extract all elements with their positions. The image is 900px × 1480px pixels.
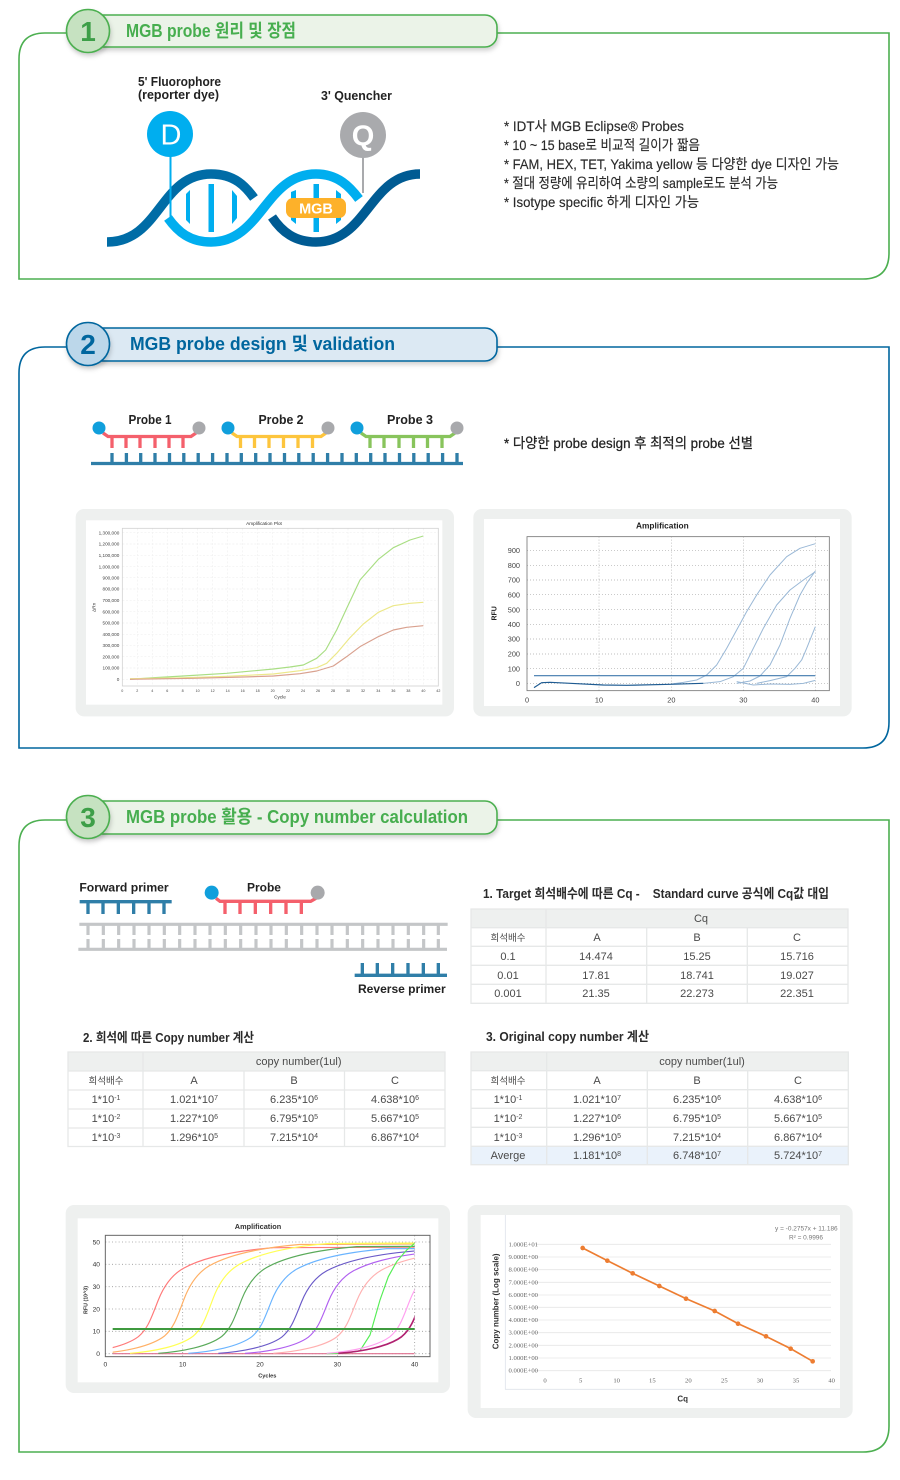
table 3: original copy number: 7 bbox=[717, 1151, 721, 1158]
table 2: copy number by dilution bbox=[68, 1052, 445, 1146]
chart: multi-dilution amplification: 20 bbox=[93, 1306, 100, 1313]
chart: standard curve bbox=[468, 1205, 853, 1418]
table 3: original copy number: 1*10 bbox=[494, 1113, 516, 1125]
table 3: original copy number: A bbox=[593, 1075, 601, 1087]
table 3: original copy number: -2 bbox=[516, 1114, 523, 1121]
chart: standard curve: 10 bbox=[613, 1377, 621, 1384]
heading bar 3: 3 bbox=[80, 802, 96, 833]
table 3: original copy number: 6.748*10 bbox=[673, 1150, 717, 1162]
chart: amplification RFU: 40 bbox=[811, 696, 819, 705]
table 2: copy number by dilution: copy number(1ul) bbox=[256, 1056, 341, 1068]
chart: multi-dilution amplification: Amplification bbox=[235, 1222, 282, 1231]
table 1: Cq values: A bbox=[593, 932, 601, 944]
table 3: original copy number: 1.296*10 bbox=[573, 1132, 617, 1144]
heading: table 2: 2. 희석에 따른 Copy number 계산 bbox=[83, 1030, 254, 1045]
table 3: original copy number: 1.227*10 bbox=[573, 1113, 617, 1125]
table 1: Cq values: Cq bbox=[694, 913, 708, 925]
chart: amplification RFU: 20 bbox=[667, 696, 675, 705]
chart: amplification RFU: 700 bbox=[508, 576, 520, 585]
diagram: probes 1-3 on template: Probe 2 bbox=[258, 412, 304, 427]
diagram: primers and probe on DNA: Probe bbox=[247, 880, 281, 894]
chart: amplification plot: 10 bbox=[196, 689, 200, 693]
table 1: Cq values: B bbox=[693, 932, 701, 944]
chart: amplification RFU: 600 bbox=[508, 590, 520, 599]
chart: amplification plot: 34 bbox=[376, 689, 380, 693]
table 3: original copy number: B bbox=[693, 1075, 701, 1087]
chart: amplification RFU: RFU bbox=[491, 606, 498, 621]
heading: table 1: 1. Target 희석배수에 따른 Cq - Standard curve 공식에 Cq값 대입 bbox=[483, 886, 829, 901]
chart: standard curve: 0 bbox=[543, 1377, 547, 1384]
chart: standard curve: 20 bbox=[685, 1377, 692, 1384]
table 3: original copy number: -1 bbox=[516, 1095, 523, 1102]
label: 3' quencher: 3' Quencher bbox=[321, 88, 392, 103]
bullet list: probe advantages bbox=[504, 118, 839, 210]
chart: amplification plot: 2 bbox=[136, 689, 138, 693]
label: 5' fluorophore: (reporter dye) bbox=[138, 87, 219, 102]
table 2: copy number by dilution: 1.227*10 bbox=[170, 1113, 214, 1125]
table 1: Cq values: 18.741 bbox=[680, 970, 714, 982]
chart: amplification plot: 28 bbox=[331, 689, 335, 693]
bullet list: probe advantages: * 10 ~ 15 base로 비교적 길이가 짧음 bbox=[504, 137, 700, 153]
table 1: Cq values: 희석배수 bbox=[491, 933, 526, 944]
table 2: copy number by dilution: 6.235*10 bbox=[270, 1094, 314, 1106]
chart: amplification RFU: 800 bbox=[508, 561, 520, 570]
diagram: primers and probe on DNA bbox=[78, 880, 448, 996]
table 2: copy number by dilution: 4.638*10 bbox=[371, 1094, 415, 1106]
chart: multi-dilution amplification: 10 bbox=[179, 1361, 187, 1368]
chart: amplification RFU: 300 bbox=[508, 635, 520, 644]
panel: section 1 principle bbox=[19, 10, 889, 279]
heading bar 2 bbox=[66, 322, 497, 366]
chart: amplification RFU: 30 bbox=[739, 696, 747, 705]
chart: standard curve: 5 bbox=[579, 1377, 583, 1384]
table 2: copy number by dilution: -2 bbox=[114, 1114, 121, 1121]
chart: amplification plot: 36 bbox=[391, 689, 395, 693]
table 2: copy number by dilution: 4 bbox=[314, 1133, 318, 1140]
table 3: original copy number: 1.021*10 bbox=[573, 1094, 617, 1106]
chart: amplification plot: 200,000 bbox=[102, 654, 120, 659]
bullet list: probe advantages: * IDT사 MGB Eclipse® Probes bbox=[504, 118, 684, 134]
chart: standard curve: 40 bbox=[828, 1377, 836, 1384]
chart: standard curve: 9.000E+00 bbox=[509, 1254, 539, 1261]
table 2: copy number by dilution: 희석배수 bbox=[89, 1076, 124, 1087]
panel border 3 bbox=[19, 820, 889, 1452]
label: 5' fluorophore bbox=[138, 74, 221, 102]
chart: amplification RFU: 0 bbox=[516, 679, 520, 688]
chart: amplification plot: 40 bbox=[421, 689, 425, 693]
bullet list: probe advantages: * FAM, HEX, TET, Yakima yellow 등 다양한 dye 디자인 가능 bbox=[504, 156, 839, 172]
table 2: copy number by dilution: 1*10 bbox=[92, 1132, 114, 1144]
table 3: original copy number: 8 bbox=[617, 1151, 621, 1158]
table 3: original copy number: 7.215*10 bbox=[673, 1132, 717, 1144]
icon: DNA helix with dye, quencher and MGB: D bbox=[161, 120, 181, 152]
chart: standard curve: Cq bbox=[677, 1395, 688, 1404]
chart: amplification plot: 600,000 bbox=[102, 609, 120, 614]
chart: amplification RFU: Amplification bbox=[636, 520, 689, 530]
heading bar 2: 2 bbox=[80, 329, 96, 360]
chart: amplification RFU: 0 bbox=[525, 696, 529, 705]
heading bar 2: MGB probe design 및 validation bbox=[130, 334, 395, 354]
table 1: Cq values: 15.716 bbox=[780, 951, 814, 963]
bullet list: probe advantages: * Isotype specific 하게 디자인 가능 bbox=[504, 194, 699, 210]
chart: amplification plot: 38 bbox=[406, 689, 410, 693]
chart: amplification plot: ΔRn bbox=[91, 602, 96, 612]
table 2: copy number by dilution: 7.215*10 bbox=[270, 1132, 314, 1144]
table 3: original copy number: 6.235*10 bbox=[673, 1094, 717, 1106]
table 1: Cq values: 0.001 bbox=[494, 988, 522, 1000]
table 3: original copy number: 1*10 bbox=[494, 1132, 516, 1144]
diagram: primers and probe on DNA: Forward primer bbox=[79, 880, 169, 894]
chart: amplification plot: 400,000 bbox=[102, 632, 120, 637]
chart: amplification plot bbox=[76, 509, 454, 716]
diagram: probes 1-3 on template bbox=[91, 412, 464, 464]
heading: table 3: 3. Original copy number 계산 bbox=[486, 1029, 649, 1044]
chart: multi-dilution amplification: RFU (10^3) bbox=[83, 1286, 89, 1314]
chart: standard curve: Copy number (Log scale) bbox=[491, 1253, 500, 1349]
chart: multi-dilution amplification bbox=[66, 1205, 450, 1393]
chart: multi-dilution amplification: 0 bbox=[103, 1361, 107, 1368]
heading bar 1 bbox=[66, 10, 497, 52]
table 1: Cq values: 15.25 bbox=[683, 951, 711, 963]
table 1: Cq values bbox=[471, 909, 848, 1003]
chart: amplification plot: 8 bbox=[182, 689, 184, 693]
table 3: original copy number: 5 bbox=[818, 1114, 822, 1121]
chart: amplification plot: Cycle bbox=[274, 695, 286, 700]
table 3: original copy number: 6 bbox=[818, 1095, 822, 1102]
chart: amplification plot: 22 bbox=[286, 689, 290, 693]
chart: amplification plot: 700,000 bbox=[102, 598, 120, 603]
table 1: Cq values: C bbox=[793, 932, 801, 944]
chart: multi-dilution amplification: 0 bbox=[96, 1351, 100, 1358]
panel border 1 bbox=[19, 33, 889, 279]
chart: standard curve: 15 bbox=[649, 1377, 656, 1384]
chart: amplification plot: 12 bbox=[211, 689, 215, 693]
chart: amplification plot: 24 bbox=[301, 689, 305, 693]
table 2: copy number by dilution: 5 bbox=[214, 1133, 218, 1140]
panel border 2 bbox=[19, 347, 889, 748]
diagram: primers and probe on DNA: Reverse primer bbox=[358, 982, 446, 996]
chart: standard curve: R² = 0.9996 bbox=[789, 1234, 823, 1241]
chart: multi-dilution amplification: 30 bbox=[334, 1361, 341, 1368]
chart: amplification plot: 42 bbox=[436, 689, 440, 693]
table 3: original copy number: 5 bbox=[617, 1133, 621, 1140]
table 3: original copy number: 6.795*10 bbox=[673, 1113, 717, 1125]
table 1: Cq values: 17.81 bbox=[582, 970, 610, 982]
chart: amplification plot: 0 bbox=[117, 677, 120, 682]
chart: standard curve: 1.000E+00 bbox=[509, 1355, 539, 1362]
table 3: original copy number: 4 bbox=[818, 1133, 822, 1140]
table 2: copy number by dilution: 6 bbox=[415, 1095, 419, 1102]
icon: DNA helix with dye, quencher and MGB: Q bbox=[352, 120, 374, 152]
table 2: copy number by dilution: A bbox=[190, 1075, 198, 1087]
diagram: probes 1-3 on template: Probe 1 bbox=[128, 412, 172, 427]
chart: amplification plot: 1,300,000 bbox=[99, 530, 120, 535]
table 3: original copy number: 5.724*10 bbox=[774, 1150, 818, 1162]
table 2: copy number by dilution: 1*10 bbox=[92, 1113, 114, 1125]
chart: amplification RFU: 500 bbox=[508, 605, 520, 614]
chart: amplification plot: 20 bbox=[271, 689, 275, 693]
chart: amplification plot: 6 bbox=[166, 689, 168, 693]
chart: amplification plot: 14 bbox=[226, 689, 230, 693]
table 1: Cq values: 0.01 bbox=[497, 970, 519, 982]
table 2: copy number by dilution: 6 bbox=[214, 1114, 218, 1121]
chart: standard curve: 0.000E+00 bbox=[509, 1367, 539, 1374]
table 3: original copy number: 4 bbox=[717, 1133, 721, 1140]
chart: standard curve: 4.000E+00 bbox=[509, 1317, 539, 1324]
chart: amplification plot: 1,200,000 bbox=[99, 542, 120, 547]
chart: amplification plot: 1,100,000 bbox=[99, 553, 120, 558]
chart: amplification plot: 32 bbox=[361, 689, 365, 693]
table 3: original copy number: 6.867*10 bbox=[774, 1132, 818, 1144]
chart: amplification plot: 900,000 bbox=[102, 575, 120, 580]
diagram: probes 1-3 on template: Probe 3 bbox=[387, 412, 433, 427]
heading bar 1: 1 bbox=[80, 16, 96, 47]
table 2: copy number by dilution: 5.667*10 bbox=[371, 1113, 415, 1125]
chart: multi-dilution amplification: 50 bbox=[93, 1239, 100, 1246]
table 3: original copy number bbox=[471, 1052, 848, 1165]
table 3: original copy number: Averge bbox=[491, 1150, 525, 1162]
chart: amplification plot: 500,000 bbox=[102, 621, 120, 626]
table 2: copy number by dilution: C bbox=[391, 1075, 399, 1087]
table 2: copy number by dilution: -3 bbox=[114, 1133, 121, 1140]
chart: amplification plot: Amplification Plot bbox=[246, 521, 283, 526]
chart: standard curve: 35 bbox=[793, 1377, 800, 1384]
heading bar 1: MGB probe 원리 및 장점 bbox=[126, 21, 296, 41]
table 1: Cq values: 0.1 bbox=[500, 951, 516, 963]
note: probe selection: * 다양한 probe design 후 최적의 probe 선별 bbox=[504, 435, 753, 451]
table 2: copy number by dilution: 1.021*10 bbox=[170, 1094, 214, 1106]
heading bar 3 bbox=[66, 796, 497, 838]
panel: section 3 copy number calculation bbox=[19, 796, 889, 1452]
table 2: copy number by dilution: 1.296*10 bbox=[170, 1132, 214, 1144]
label: 5' fluorophore: 5' Fluorophore bbox=[138, 74, 221, 89]
table 2: copy number by dilution: 6 bbox=[314, 1095, 318, 1102]
table 3: original copy number: 4.638*10 bbox=[774, 1094, 818, 1106]
chart: amplification plot: 18 bbox=[256, 689, 260, 693]
chart: standard curve: 3.000E+00 bbox=[509, 1330, 539, 1337]
chart: amplification RFU: 100 bbox=[508, 664, 520, 673]
table 2: copy number by dilution: 4 bbox=[415, 1133, 419, 1140]
chart: amplification plot: 300,000 bbox=[102, 643, 120, 648]
table 1: Cq values: 22.273 bbox=[680, 988, 714, 1000]
table 1: Cq values: 19.027 bbox=[780, 970, 814, 982]
chart: amplification plot: 1,000,000 bbox=[99, 564, 120, 569]
icon: DNA helix with dye, quencher and MGB bbox=[107, 111, 420, 242]
chart: amplification plot: 16 bbox=[241, 689, 245, 693]
chart: standard curve: 1.000E+01 bbox=[509, 1241, 538, 1248]
chart: amplification plot: 0 bbox=[121, 689, 123, 693]
panel: section 2 design and validation bbox=[19, 322, 889, 748]
bullet list: probe advantages: * 절대 정량에 유리하여 소량의 sample로도 분석 가능 bbox=[504, 175, 778, 191]
chart: standard curve: 2.000E+00 bbox=[509, 1342, 539, 1349]
chart: amplification plot: 100,000 bbox=[102, 666, 120, 671]
table 3: original copy number: 희석배수 bbox=[491, 1076, 526, 1087]
table 3: original copy number: 6 bbox=[717, 1095, 721, 1102]
chart: standard curve: 25 bbox=[721, 1377, 728, 1384]
table 3: original copy number: 5.667*10 bbox=[774, 1113, 818, 1125]
table 1: Cq values: 14.474 bbox=[579, 951, 613, 963]
chart: multi-dilution amplification: 10 bbox=[93, 1329, 100, 1336]
chart: standard curve: 30 bbox=[757, 1377, 764, 1384]
chart: amplification RFU bbox=[473, 509, 852, 716]
table 2: copy number by dilution: 6.795*10 bbox=[270, 1113, 314, 1125]
table 2: copy number by dilution: 1*10 bbox=[92, 1094, 114, 1106]
chart: amplification plot: 26 bbox=[316, 689, 320, 693]
chart: multi-dilution amplification: 40 bbox=[93, 1262, 100, 1269]
chart: amplification plot: 800,000 bbox=[102, 587, 120, 592]
table 3: original copy number: -3 bbox=[516, 1133, 523, 1140]
table 3: original copy number: copy number(1ul) bbox=[659, 1056, 745, 1068]
chart: standard curve: y = -0.2757x + 11.186 bbox=[775, 1225, 838, 1232]
table 2: copy number by dilution: -1 bbox=[114, 1095, 121, 1102]
chart: amplification plot: 30 bbox=[346, 689, 350, 693]
chart: amplification plot: 4 bbox=[151, 689, 153, 693]
chart: multi-dilution amplification: 30 bbox=[93, 1284, 100, 1291]
chart: amplification RFU: 400 bbox=[508, 620, 520, 629]
chart: amplification RFU: 10 bbox=[595, 696, 603, 705]
table 2: copy number by dilution: B bbox=[290, 1075, 298, 1087]
heading bar 3: MGB probe 활용 - Copy number calculation bbox=[126, 807, 468, 827]
table 3: original copy number: 6 bbox=[617, 1114, 621, 1121]
chart: amplification RFU: 900 bbox=[508, 546, 520, 555]
chart: multi-dilution amplification: 40 bbox=[411, 1361, 419, 1368]
table 3: original copy number: 5 bbox=[717, 1114, 721, 1121]
table 3: original copy number: 7 bbox=[617, 1095, 621, 1102]
chart: standard curve: 7.000E+00 bbox=[509, 1279, 539, 1286]
chart: standard curve: 6.000E+00 bbox=[509, 1292, 539, 1299]
table 3: original copy number: 7 bbox=[818, 1151, 822, 1158]
table 2: copy number by dilution: 5 bbox=[314, 1114, 318, 1121]
icon: DNA helix with dye, quencher and MGB: MGB bbox=[299, 202, 333, 218]
table 3: original copy number: C bbox=[794, 1075, 802, 1087]
table 2: copy number by dilution: 6.867*10 bbox=[371, 1132, 415, 1144]
table 2: copy number by dilution: 5 bbox=[415, 1114, 419, 1121]
table 2: copy number by dilution: 7 bbox=[214, 1095, 218, 1102]
table 3: original copy number: 1*10 bbox=[494, 1094, 516, 1106]
chart: standard curve: 8.000E+00 bbox=[509, 1267, 539, 1274]
chart: multi-dilution amplification: 20 bbox=[256, 1361, 264, 1368]
chart: standard curve: 5.000E+00 bbox=[509, 1304, 539, 1311]
table 3: original copy number: 1.181*10 bbox=[573, 1150, 617, 1162]
table 1: Cq values: 21.35 bbox=[582, 988, 610, 1000]
table 1: Cq values: 22.351 bbox=[780, 988, 814, 1000]
chart: multi-dilution amplification: Cycles bbox=[258, 1373, 276, 1379]
chart: amplification RFU: 200 bbox=[508, 650, 520, 659]
